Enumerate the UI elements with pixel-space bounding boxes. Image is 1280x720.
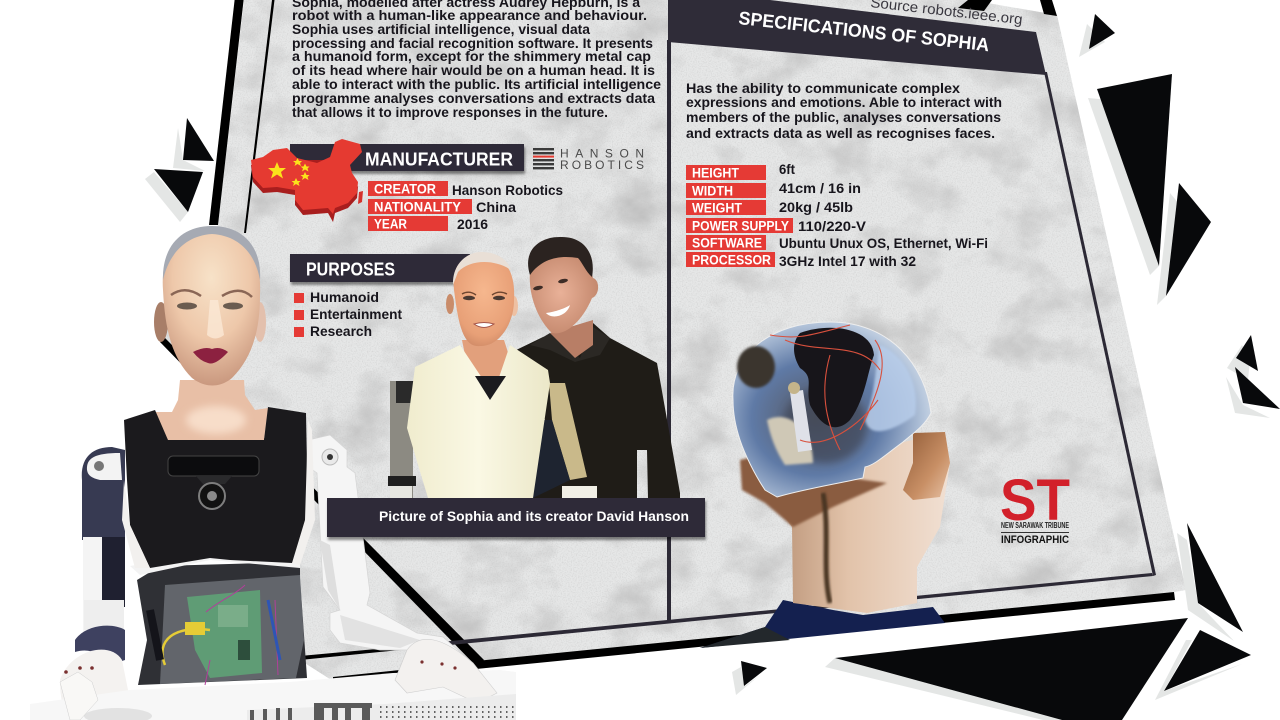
text block: introduction: Sophia uses artificial intelligence, visual data — [292, 22, 590, 37]
specification table: HEIGHT — [692, 166, 740, 180]
specification table: 110/220-V — [798, 219, 866, 234]
specification table: SOFTWARE — [692, 236, 762, 250]
left arm — [82, 447, 125, 540]
heading: manufacturer: MANUFACTURER — [365, 150, 513, 170]
ear — [903, 432, 950, 500]
logo: ST New Sarawak Tribune Infographic: INFOGRAPHIC — [1001, 534, 1069, 546]
heading: purposes — [290, 254, 470, 282]
specification table: 20kg / 45lb — [779, 200, 853, 215]
frame: black and dark stripes — [160, 0, 1175, 681]
black vest — [124, 407, 308, 568]
lower torso — [137, 562, 307, 685]
icon: China flag map — [251, 139, 363, 222]
specification table: 41cm / 16 in — [779, 181, 861, 196]
transparent skull — [733, 322, 931, 497]
logo: Hanson Robotics: HANSON — [560, 146, 644, 160]
text block: introduction: programme analyses conversations and extracts data — [292, 91, 656, 106]
image: robot head from behind — [700, 322, 950, 648]
head — [154, 302, 168, 342]
mechanical arms — [390, 381, 413, 498]
heading: specifications of Sophia: SPECIFICATIONS OF SOPHIA — [738, 7, 990, 55]
manufacturer details: 2016 — [457, 217, 488, 232]
manufacturer details: YEAR — [374, 216, 407, 232]
manufacturer details: CREATOR — [374, 182, 436, 196]
David Hanson head — [530, 252, 598, 333]
circuit board — [187, 590, 262, 678]
sensor bar and camera — [168, 456, 259, 476]
image: Sophia and David Hanson — [388, 237, 680, 498]
manufacturer details: Hanson Robotics — [452, 183, 563, 198]
manufacturer details: China — [476, 200, 517, 215]
panel: grunge paper background — [150, 0, 1200, 700]
manufacturer details: NATIONALITY — [374, 200, 461, 214]
caption bar — [327, 498, 705, 537]
text block: specifications summary: and extracts data as well as recognises faces. — [686, 126, 995, 141]
text block: specifications summary: Has the ability to communicate complex — [686, 81, 961, 96]
neck and chest — [155, 380, 268, 440]
list: purposes: Entertainment — [310, 307, 403, 322]
specification table: PROCESSOR — [692, 252, 771, 268]
text block: introduction: processing and facial recognition software. It presents — [292, 36, 653, 51]
keyboard — [247, 694, 516, 720]
David Hanson neck — [550, 320, 593, 358]
heading: specifications of Sophia — [668, 0, 1046, 75]
desk — [30, 670, 516, 720]
text block: specifications summary: expressions and emotions. Able to interact with — [686, 95, 1002, 110]
manufacturer details — [368, 181, 563, 232]
list: purposes — [294, 290, 403, 339]
mouse — [84, 708, 152, 720]
text block: specifications summary — [686, 81, 1002, 141]
heading: purposes: PURPOSES — [306, 260, 395, 280]
logo: ST New Sarawak Tribune Infographic: NEW SARAWAK TRIBUNE — [1001, 521, 1069, 530]
heading: manufacturer — [290, 144, 524, 171]
text block: introduction: able to interact with the public. Its artificial intelligence — [292, 77, 662, 92]
text block: introduction: that allows it to improve responses in the future. — [292, 105, 608, 120]
specification table: 6ft — [779, 162, 795, 177]
right arm — [306, 435, 497, 703]
collar — [700, 600, 945, 648]
right hand — [395, 639, 497, 703]
specification table: WIDTH — [692, 184, 733, 198]
text block: specifications summary: members of the public, analyses conversations — [686, 110, 1001, 125]
left hand fingers — [60, 672, 98, 720]
logo: Hanson Robotics: ROBOTICS — [560, 158, 644, 172]
specification table: POWER SUPPLY — [692, 218, 789, 234]
David Hanson shirt — [512, 323, 680, 498]
text block: introduction — [292, 0, 662, 120]
logo: Hanson Robotics — [533, 146, 644, 172]
text block: introduction: of its head where hair would be on a human head. It is — [292, 63, 655, 78]
text block: introduction: a humanoid form, except for the shimmery metal cap — [292, 49, 651, 64]
logo: ST New Sarawak Tribune Infographic: ST — [1000, 468, 1070, 533]
list: purposes: Research — [310, 324, 372, 339]
text block: introduction: robot with a human-like appearance and behaviour. — [292, 8, 647, 23]
blouse — [407, 345, 550, 498]
list: purposes: Humanoid — [310, 290, 379, 305]
caption bar: Picture of Sophia and its creator David Hanson — [379, 509, 689, 524]
neck — [765, 432, 950, 613]
specification table: 3GHz Intel 17 with 32 — [779, 254, 916, 269]
specification table — [686, 162, 988, 269]
small Sophia neck and head — [462, 340, 512, 400]
image: Sophia robot at desk — [30, 226, 516, 720]
specification table: WEIGHT — [692, 200, 743, 216]
specification table: Ubuntu Unux OS, Ethernet, Wi-Fi — [779, 236, 988, 251]
